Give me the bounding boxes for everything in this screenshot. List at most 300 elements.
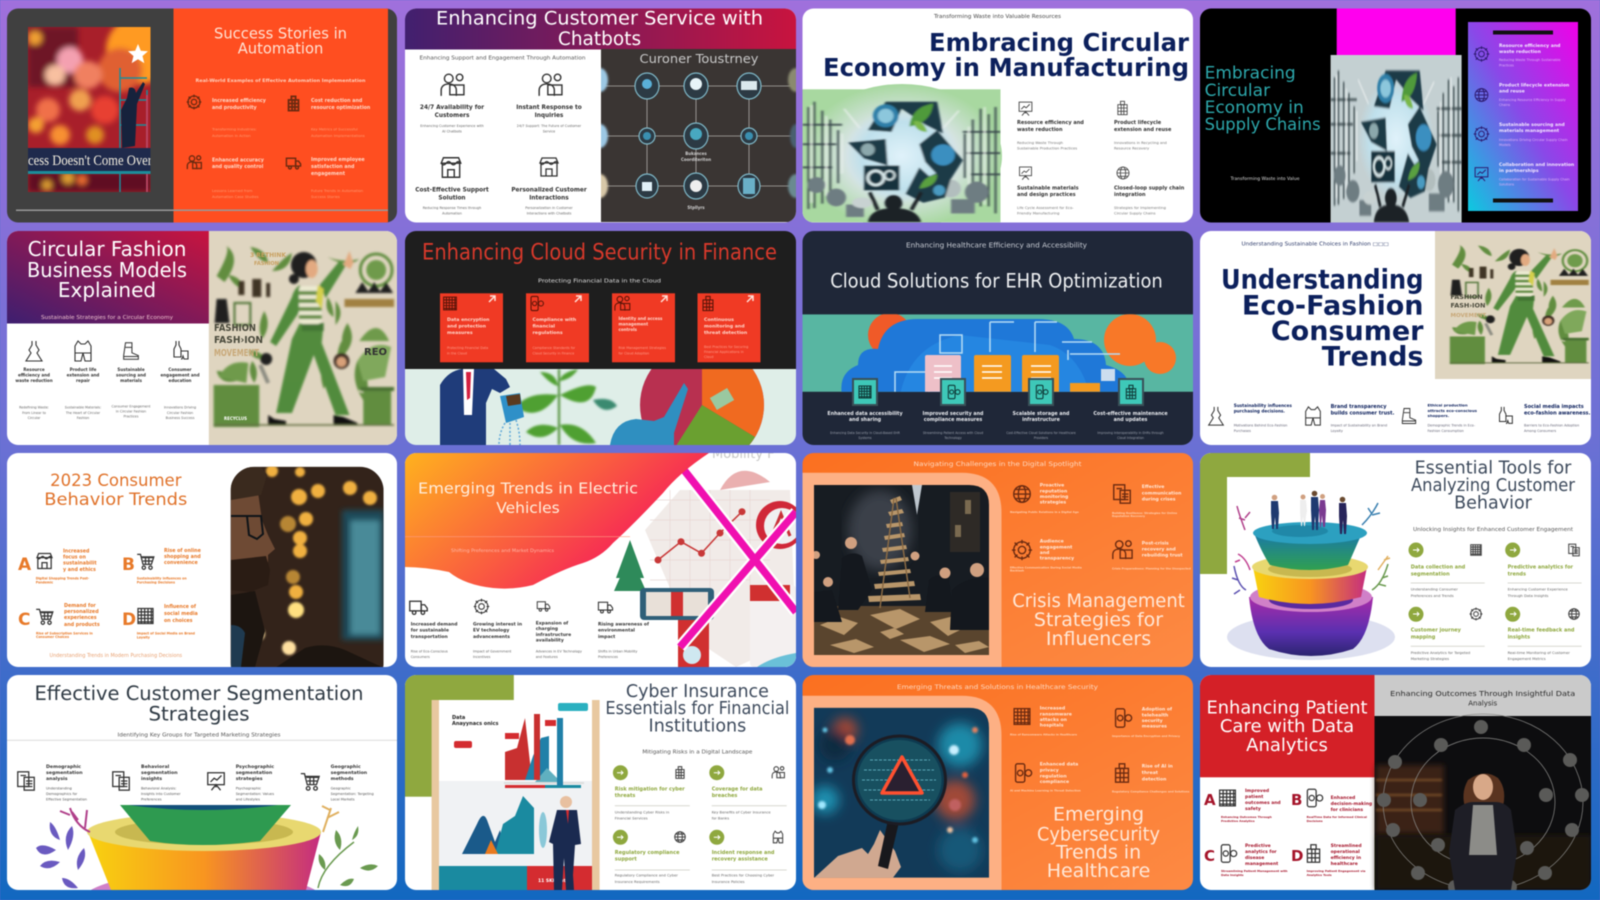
items: mapping: [1411, 634, 1436, 640]
footer note: Understanding Trends in Modern Purchasing Decisions: [50, 653, 183, 659]
panel: Embracing Circular Economy in Manufacturing: Circular Supply Chains: [1114, 212, 1156, 216]
items: Key Benefits of Cyber Insurance: [712, 810, 771, 814]
panel: Emerging Cybersecurity Trends in Healthcare: hospitals: [1040, 722, 1064, 728]
panel: Cyber Insurance Essentials for Financial Institutions: [405, 675, 796, 890]
panel: Success Stories in Automation: Success Stories: [311, 195, 340, 199]
subtitle: Enhancing Support and Engagement Through Automation: [420, 56, 586, 62]
title: Cyber Insurance: [626, 682, 769, 702]
gradient list panel: Innovations Driving Circular Supply Chain: [1499, 138, 1568, 142]
items: B: [122, 555, 135, 575]
item titles: sourcing and: [116, 372, 146, 378]
items: A: [1204, 791, 1216, 809]
panel: Emerging Cybersecurity Trends in Healthcare: privacy: [1040, 768, 1059, 774]
panel: Crisis Management Strategies for Influencers: Reputation Recovery: [1112, 514, 1145, 518]
panel: 2023 Consumer Behavior Trends: focus on: [63, 554, 86, 560]
panel: Crisis Management Strategies for Influencers: Audience: [1040, 538, 1064, 544]
gradient banner: [405, 453, 709, 589]
item titles: Product life: [70, 367, 97, 372]
feature cards: Financial Applications in: [704, 350, 744, 354]
panel: Effective Customer Segmentation Strategies: Understanding: [46, 786, 72, 790]
panel: Effective Customer Segmentation Strategies: Segmentation: Targeting: [331, 792, 374, 796]
image: recycling concept: [802, 84, 1002, 228]
title: Supply Chains: [1205, 115, 1321, 135]
panel: Understanding Eco-Fashion Consumer Trends: Loyalty: [1331, 429, 1343, 433]
gradient list panel: [1468, 22, 1578, 211]
title: Analyzing Customer: [1411, 476, 1576, 496]
panel: 2023 Consumer Behavior Trends: Consumer Choices: [36, 635, 69, 639]
panel: Enhancing Patient Care with Data Analytics: for clinicians: [1331, 807, 1363, 813]
title: Emerging: [1053, 804, 1144, 826]
panel: Understanding Eco-Fashion Consumer Trends: purchasing decisions.: [1234, 408, 1285, 414]
panel: Enhancing Patient Care with Data Analytics: Analysis: [1468, 700, 1497, 708]
panel: 2023 Consumer Behavior Trends: Behavior Trends: [44, 490, 187, 509]
panel: Emerging Cybersecurity Trends in Healthcare: AI and Machine Learning in Threat Detection: [1010, 788, 1081, 792]
items: segmentation: [1411, 572, 1450, 578]
cropped image lettering: Mobility F: [712, 447, 775, 462]
feature cards: management: [618, 322, 648, 326]
panel: Success Stories in Automation: Future Trends in Automation: [311, 189, 364, 193]
image: data analytics poster: [432, 700, 600, 890]
title: Essentials for Financial: [605, 699, 789, 719]
item titles: Customers: [435, 113, 470, 119]
title: Analytics: [1246, 735, 1328, 756]
panel: Embracing Circular Economy in Manufacturing: Resource Recovery: [1114, 146, 1150, 150]
item descriptions: Improving Interoperability in EHRs through: [1097, 431, 1164, 435]
image: fashion movement: FASHION: [1450, 293, 1483, 301]
panel: Enhancing Patient Care with Data Analytics: Improving Patient Engagement via: [1307, 869, 1365, 873]
panel: Effective Customer Segmentation Strategies: segmentation: [141, 770, 178, 776]
image: fashion movement: REO: [364, 347, 387, 358]
gradient list panel: Collaboration and innovation: [1499, 162, 1574, 168]
panel: Embracing Circular Economy in Manufacturing: integration: [1114, 192, 1146, 198]
panel: Embracing Circular Economy in Manufacturing: Sustainable materials: [1017, 186, 1079, 192]
panel: Emerging Trends in Electric Vehicles: Increased demand: [411, 622, 457, 628]
panel: 2023 Consumer Behavior Trends: y and ethics: [63, 567, 96, 573]
illustration: stacked funnel with team: [1227, 491, 1395, 660]
panel: Crisis Management Strategies for Influencers: recovery and: [1142, 546, 1176, 552]
title: Strategies for: [1034, 609, 1163, 631]
item descriptions: Reducing Response Times through: [423, 206, 481, 210]
panel: Enhancing Patient Care with Data Analytics: efficiency in: [1331, 855, 1361, 861]
feature cards: Cloud Security in Finance: [532, 352, 574, 356]
panel: Understanding Eco-Fashion Consumer Trends: shoppers.: [1428, 413, 1450, 418]
panel: Emerging Trends in Electric Vehicles: Consumers: [411, 655, 430, 659]
items: [1209, 407, 1512, 425]
items: insights: [1508, 634, 1530, 640]
peach image frame: [802, 696, 1002, 890]
item descriptions: Interactions with Chatbots: [527, 212, 572, 216]
feature cards: Compliance with: [532, 317, 576, 323]
panel: Emerging Trends in Electric Vehicles: Preferences: [598, 655, 618, 659]
gradient list panel: waste reduction: [1499, 49, 1541, 55]
panel: Crisis Management Strategies for Influencers: during crises: [1142, 496, 1176, 502]
item descriptions: Sustainable Materials:: [65, 406, 101, 410]
panel: Embracing Circular Economy in Manufacturing: extension and reuse: [1114, 127, 1172, 133]
panel: 2023 Consumer Behavior Trends: shopping and: [164, 554, 201, 560]
panel: 2023 Consumer Behavior Trends: Increased: [63, 548, 90, 554]
panel: 2023 Consumer Behavior Trends: Purchasing Decisions: [137, 580, 175, 584]
panel: Emerging Trends in Electric Vehicles: Impact of Government: [473, 650, 512, 654]
panel: Emerging Trends in Electric Vehicles: charging: [536, 626, 558, 632]
items: Real-time Monitoring of Customer: [1508, 651, 1570, 655]
item titles: repair: [76, 378, 90, 383]
panel: 2023 Consumer Behavior Trends: Loyalty: [137, 636, 151, 640]
image: fashion movement: FASHION: [214, 323, 256, 334]
title: Enhancing Customer Service with: [436, 8, 763, 30]
panel: Enhancing Patient Care with Data Analytics: Predictive Analytics: [1221, 819, 1255, 823]
panel: Enhancing Customer Service with Chatbots: [405, 8, 804, 222]
item descriptions: Systems: [858, 436, 872, 440]
item titles: Scalable storage and: [1013, 411, 1070, 417]
items: Predictive Analytics for Targeted: [1411, 651, 1470, 655]
panel: Understanding Eco-Fashion Consumer Trends: Ethical production: [1428, 402, 1468, 408]
item titles: and sharing: [849, 417, 882, 423]
panel: Crisis Management Strategies for Influencers: communication: [1142, 490, 1181, 496]
feature cards: Cloud: [704, 355, 713, 359]
title: Behavior: [1454, 494, 1533, 514]
item descriptions: Technology: [943, 436, 962, 440]
title: Understanding: [1221, 264, 1424, 296]
item descriptions: Enhancing Data Security in Cloud-Based EHR: [830, 431, 901, 435]
panel: Success Stories in Automation: Automation Implementations: [311, 134, 365, 138]
items: Improved employee: [311, 157, 365, 163]
items: and productivity: [212, 105, 258, 111]
title: [605, 682, 789, 736]
title: Circular: [1205, 81, 1270, 101]
subtitle: Identifying Key Groups for Targeted Marketing Strategies: [118, 732, 281, 738]
image: analyst surrounded by patient network: [1374, 714, 1591, 894]
title: [1205, 64, 1321, 135]
panel: Understanding Eco-Fashion Consumer Trends: Demographic Trends in Eco-: [1428, 424, 1476, 428]
panel: Cloud Solutions for EHR Optimization: [802, 231, 1194, 445]
item descriptions: Automation: [442, 212, 462, 216]
panel: Effective Customer Segmentation Strategies: Local Markets: [331, 798, 355, 802]
title: Enhancing Cloud Security in Finance: [422, 240, 777, 266]
gradient list panel: materials management: [1499, 128, 1560, 134]
panel: 2023 Consumer Behavior Trends: Rise of Subscription Services in: [36, 632, 94, 636]
panel: Emerging Cybersecurity Trends in Healthcare: telehealth: [1142, 712, 1168, 718]
panel: Emerging Trends in Electric Vehicles: Shifts in Urban Mobility: [598, 650, 637, 654]
panel: Crisis Management Strategies for Influencers: monitoring: [1040, 494, 1068, 500]
panel: Embracing Circular Economy in Manufacturing: Product lifecycle: [1114, 120, 1162, 126]
panel: Emerging Cybersecurity Trends in Healthcare: attacks on: [1040, 717, 1067, 723]
gradient list panel: Models: [1499, 143, 1511, 147]
title: Circular Fashion: [28, 237, 186, 261]
items: Regulatory Compliance and Cyber: [615, 874, 678, 878]
item descriptions: Streamlining Patient Access with Cloud: [923, 431, 983, 435]
items: Real-time feedback and: [1508, 628, 1575, 634]
items: [410, 599, 613, 614]
panel: Crisis Management Strategies for Influencers: Navigating Public Relations in a Digital Age: [1010, 510, 1079, 514]
title: Business Models: [27, 258, 187, 282]
item descriptions: Redefining Waste:: [19, 406, 49, 410]
panel: Crisis Management Strategies for Influencers: Building Resilience: Strategies for Online: [1112, 511, 1177, 515]
item descriptions: Circular Fashion: [167, 411, 193, 415]
panel: Success Stories in Automation: Key Metrics of Successful: [311, 128, 358, 132]
panel: Embracing Circular Economy in Manufacturing: [802, 8, 1194, 228]
items: Customer journey: [1411, 628, 1462, 634]
image: data analytics poster: 11 SKK sutne: [538, 878, 572, 884]
panel: Crisis Management Strategies for Influencers: strategies: [1040, 500, 1066, 506]
item titles: efficiency and: [18, 372, 50, 378]
items: Enhancing Customer Experience: [1508, 588, 1568, 592]
title: [1221, 264, 1424, 372]
image: customer journey network: [592, 49, 804, 222]
subtitle: Emerging Threats and Solutions in Healthcare Security: [897, 684, 1099, 691]
panel: 2023 Consumer Behavior Trends: Sustainability Influences on: [137, 576, 187, 580]
panel: 2023 Consumer Behavior Trends: on choices: [164, 618, 193, 624]
item titles: Instant Response to: [516, 105, 582, 111]
item titles: Resource: [23, 367, 45, 372]
panel: 2023 Consumer Behavior Trends: Impact of Social Media on Brand: [137, 632, 196, 636]
panel: Enhancing Customer Service with Chatbots: Chatbots: [558, 29, 641, 50]
items: breaches: [712, 793, 737, 799]
title: Essential Tools for: [1415, 458, 1572, 478]
panel: Understanding Eco-Fashion Consumer Trends: Barriers to Eco-Fashion Adoption: [1524, 424, 1579, 428]
panel: Effective Customer Segmentation Strategies: strategies: [236, 776, 263, 782]
panel: Emerging Cybersecurity Trends in Healthcare: regulation: [1040, 774, 1067, 780]
panel: Effective Customer Segmentation Strategies: Preferences: [141, 798, 162, 802]
gradient list panel: Sustainable sourcing and: [1499, 122, 1565, 128]
item titles: Sustainable: [117, 367, 145, 372]
panel: Effective Customer Segmentation Strategies: segmentation: [331, 770, 367, 776]
panel: Effective Customer Segmentation Strategies: Geographic: [331, 764, 361, 770]
items: [613, 765, 787, 884]
items: Insurance Requirements: [615, 880, 660, 884]
feature cards: [440, 293, 760, 362]
panel: Understanding Eco-Fashion Consumer Trends: Fashion Consumption: [1428, 429, 1464, 433]
items: Cost reduction and: [311, 98, 363, 104]
title: Eco-Fashion: [1242, 290, 1424, 322]
item descriptions: Service: [543, 130, 555, 134]
panel: Emerging Trends in Electric Vehicles: impact: [598, 634, 616, 640]
image: fashion movement: MOVEMENT: [1450, 313, 1486, 319]
panel: Emerging Cybersecurity Trends in Healthcare: Rise of Ransomware Attacks in Healthcare: [1010, 732, 1077, 736]
subtitle: Sustainable Strategies for a Circular Economy: [41, 315, 173, 321]
panel: Effective Customer Segmentation Strategies: segmentation: [236, 770, 272, 776]
panel: Enhancing Patient Care with Data Analytics: operational: [1331, 849, 1360, 855]
items: trends: [1508, 572, 1526, 578]
panel: Embracing Circular Economy in Manufacturing: Reducing Waste Through: [1017, 141, 1064, 145]
panel: Emerging Cybersecurity Trends in Healthcare: detection: [1142, 776, 1166, 782]
panel: Enhancing Patient Care with Data Analytics: Enhanced: [1331, 795, 1355, 801]
item descriptions: Circular: [28, 416, 41, 420]
image: fashion movement: RECYCLUS: [224, 416, 247, 421]
items: Enhanced accuracy: [212, 158, 265, 164]
panel: Enhancing Patient Care with Data Analytics: healthcare: [1331, 861, 1358, 867]
panel: Embracing Circular Economy in Manufacturing: Sustainable Production Practices: [1017, 146, 1077, 150]
panel: Emerging Cybersecurity Trends in Healthcare: [802, 675, 1194, 890]
panel: Understanding Eco-Fashion Consumer Trends: Brand transparency: [1331, 404, 1387, 410]
image caption: cess Doesn't Come Over: [28, 153, 152, 169]
panel: 2023 Consumer Behavior Trends: experiences: [64, 615, 97, 621]
title: Economy in: [1205, 98, 1304, 118]
feature cards: in the Cloud: [447, 352, 467, 356]
item descriptions: 24/7 Support: The Future of Customer: [517, 124, 582, 128]
icons: [26, 341, 188, 361]
items: [187, 95, 371, 177]
panel: Enhancing Customer Service with Chatbots: Stpllyrs: [687, 205, 705, 210]
items: and quality control: [212, 164, 264, 170]
panel: Embracing Circular Economy in Manufacturing: Innovations in Recycling and: [1114, 141, 1167, 145]
item titles: engagement and: [160, 372, 200, 378]
panel: Emerging Trends in Electric Vehicles: environmental: [598, 628, 635, 634]
image: trend chart collage: [614, 447, 804, 667]
subtitle: Shifting Preferences and Market Dynamics: [451, 548, 555, 554]
gradient list panel: Chains: [1499, 103, 1510, 107]
title: [27, 237, 187, 302]
panel: Success Stories in Automation: Automation Case Studies: [212, 195, 259, 199]
panel: Embracing Circular Economy in Manufacturing: Closed-loop supply chain: [1114, 186, 1185, 192]
subtitle: Real-World Examples of Effective Automation Implementation: [196, 78, 366, 84]
image: man facing monitor with bokeh lights: [231, 465, 384, 668]
panel: Crisis Management Strategies for Influencers: engagement: [1040, 544, 1073, 550]
panel: Effective Customer Segmentation Strategies: Strategies: [148, 702, 250, 726]
item titles: compliance measures: [924, 417, 982, 423]
item descriptions: Business Success: [166, 416, 195, 420]
title: Institutions: [649, 716, 746, 736]
title: 2023 Consumer: [50, 471, 182, 490]
gradient list panel: in partnerships: [1499, 168, 1539, 174]
panel: Emerging Cybersecurity Trends in Healthcare: Enhanced data: [1040, 762, 1078, 768]
item titles: and updates: [1114, 417, 1147, 423]
item titles: waste reduction: [15, 378, 53, 383]
panel: Understanding Eco-Fashion Consumer Trends: Impact of Sustainability on Brand: [1331, 424, 1387, 428]
items: [1014, 709, 1132, 782]
panel: Effective Customer Segmentation Strategies: analysis: [46, 776, 68, 782]
red header: [1200, 675, 1374, 777]
feature cards: Data encryption: [447, 317, 490, 323]
items: C: [1204, 847, 1215, 865]
panel: Success Stories in Automation: Transforming Industries:: [211, 128, 257, 132]
panel: Crisis Management Strategies for Influencers: Backlash: [1010, 568, 1024, 572]
panel: Understanding Eco-Fashion Consumer Trends: eco-fashion awareness.: [1524, 410, 1591, 416]
panel: Enhancing Patient Care with Data Analytics: disease: [1245, 855, 1264, 861]
panel: Emerging Trends in Electric Vehicles: advancements: [473, 634, 510, 640]
panel: Emerging Trends in Electric Vehicles: EV technology: [473, 628, 509, 634]
image: fashion movement: 3 RETHINK: [250, 252, 286, 259]
panel: Embracing Circular Economy in Manufacturing: waste reduction: [1017, 127, 1063, 133]
panel: Embracing Circular Economy in Manufacturing: Resource efficiency and: [1017, 120, 1084, 126]
panel: Success Stories in Automation: [7, 8, 397, 222]
panel: Emerging Cybersecurity Trends in Healthcare: measures: [1142, 724, 1167, 730]
panel: Crisis Management Strategies for Influencers: Effective Communication During Social Media: [1010, 566, 1082, 570]
items: resource optimization: [311, 105, 371, 111]
title: Cybersecurity: [1037, 824, 1160, 846]
title: Trends in: [1055, 842, 1141, 864]
feature cards: for Cloud Adoption: [618, 352, 649, 356]
panel: Effective Customer Segmentation Strategies: Psychographic: [236, 764, 274, 770]
image: fashion movement: [1435, 231, 1591, 379]
items: for Banks: [712, 816, 729, 820]
panel: Embracing Circular Economy in Manufacturing: and design practices: [1017, 192, 1076, 198]
title: Embracing: [1205, 64, 1296, 84]
subtitle: Enhancing Healthcare Efficiency and Accessibility: [906, 242, 1087, 250]
items: Coverage for data: [712, 786, 763, 792]
panel: Emerging Trends in Electric Vehicles: infrastructure: [536, 632, 571, 638]
panel: Effective Customer Segmentation Strategies: methods: [331, 776, 354, 782]
subtitle: Transforming Waste into Valuable Resources: [933, 14, 1062, 20]
subtitle: Unlocking Insights for Enhanced Customer Engagement: [1413, 527, 1573, 533]
title: Effective Customer Segmentation: [34, 682, 364, 705]
panel: Enhancing Patient Care with Data Analytics: Streamlining Patient Management with: [1221, 869, 1288, 873]
items: Understanding Consumer: [1411, 588, 1458, 592]
panel: 2023 Consumer Behavior Trends: Digital Shopping Trends Post-: [36, 576, 90, 580]
panel: Emerging Cybersecurity Trends in Healthcare: threat: [1142, 770, 1159, 776]
panel: Crisis Management Strategies for Influencers: Proactive: [1040, 482, 1064, 488]
panel: Embracing Circular Economy in Manufacturing: Friendly Manufacturing: [1017, 212, 1059, 216]
gradient list panel: Collaboration for Sustainable Supply Chain: [1499, 178, 1570, 182]
items: Engagement Metrics: [1508, 657, 1546, 661]
items: [1012, 485, 1132, 560]
panel: Effective Customer Segmentation Strategies: Insights into Customer: [141, 792, 181, 796]
panel: Understanding Eco-Fashion Consumer Trends: Among Consumers: [1524, 429, 1556, 433]
gradient list panel: Enhancing Resource Efficiency in Supply: [1499, 98, 1566, 102]
panel: Enhancing Patient Care with Data Analytics: [1200, 675, 1591, 894]
panel: Emerging Trends in Electric Vehicles: transportation: [411, 634, 448, 640]
image: fashion movement: FASHION: [254, 261, 279, 267]
title: Crisis Management: [1012, 590, 1185, 612]
item descriptions: From Linear to: [22, 411, 46, 415]
item titles: materials: [120, 378, 142, 383]
items: recovery assistance: [712, 856, 768, 862]
items: C: [18, 610, 30, 630]
panel: Crisis Management Strategies for Influencers: Crisis Preparedness: Planning for the Unexpected: [1112, 566, 1191, 570]
items: Predictive analytics for: [1508, 564, 1574, 570]
item descriptions: Fashion: [77, 416, 89, 420]
item titles: Solution: [438, 196, 466, 202]
item titles: [827, 411, 1168, 423]
gradient list panel: Resource efficiency and: [1499, 43, 1560, 49]
image: data analytics poster: Anayynacs onics: [452, 721, 498, 727]
panel: Enhancing Patient Care with Data Analytics: Decisions: [1307, 819, 1323, 823]
rule: [16, 210, 388, 211]
panel: Understanding Eco-Fashion Consumer Trends: Motivations Behind Eco-Fashion: [1234, 424, 1287, 428]
image heading: Curoner Toustrney: [640, 52, 758, 66]
panel: Effective Customer Segmentation Strategies: Effective Segmentation: [46, 798, 87, 802]
panel: Emerging Trends in Electric Vehicles: Rise of Eco-Conscious: [411, 650, 448, 654]
feature cards: controls: [618, 327, 637, 332]
feature cards: Compliance Standards for: [532, 346, 576, 350]
item titles: Consumer: [168, 367, 192, 372]
panel: Emerging Trends in Electric Vehicles: Vehicles: [496, 499, 560, 517]
items: [1204, 791, 1303, 865]
icons: [441, 74, 562, 177]
image: magnifier over warning sign: [811, 708, 989, 883]
panel: Emerging Trends in Electric Vehicles: and Features: [536, 655, 558, 659]
item titles: Enhanced data accessibility: [827, 411, 903, 417]
item titles: Interactions: [529, 196, 569, 202]
items: Insurance Policies: [712, 880, 745, 884]
feature cards: Best Practices for Securing: [704, 345, 748, 349]
items: Best Practices for Choosing Cyber: [712, 874, 775, 878]
item titles: Cost-Effective Support: [415, 188, 489, 194]
items: engagement: [311, 171, 346, 177]
gradient list panel: and reuse: [1499, 88, 1525, 94]
panel: Embracing Circular Economy in Manufacturing: Strategies for Implementing: [1114, 206, 1166, 210]
panel: Enhancing Patient Care with Data Analytics: Enhancing Outcomes Through Insightful Data: [1390, 690, 1575, 698]
subtitle: Mitigating Risks in a Digital Landscape: [642, 750, 752, 756]
items: Regulatory compliance: [615, 850, 680, 856]
panel: Success Stories in Automation: Automation: [238, 40, 323, 58]
panel: Emerging Cybersecurity Trends in Healthcare: Rise of AI in: [1142, 764, 1173, 770]
item descriptions: Practices: [124, 414, 139, 418]
items: satisfaction and: [311, 164, 355, 170]
panel: 2023 Consumer Behavior Trends: Influence of: [164, 604, 197, 610]
items: D: [1291, 847, 1303, 865]
title: Cloud Solutions for EHR Optimization: [830, 270, 1163, 292]
item titles: Inquiries: [535, 113, 564, 119]
